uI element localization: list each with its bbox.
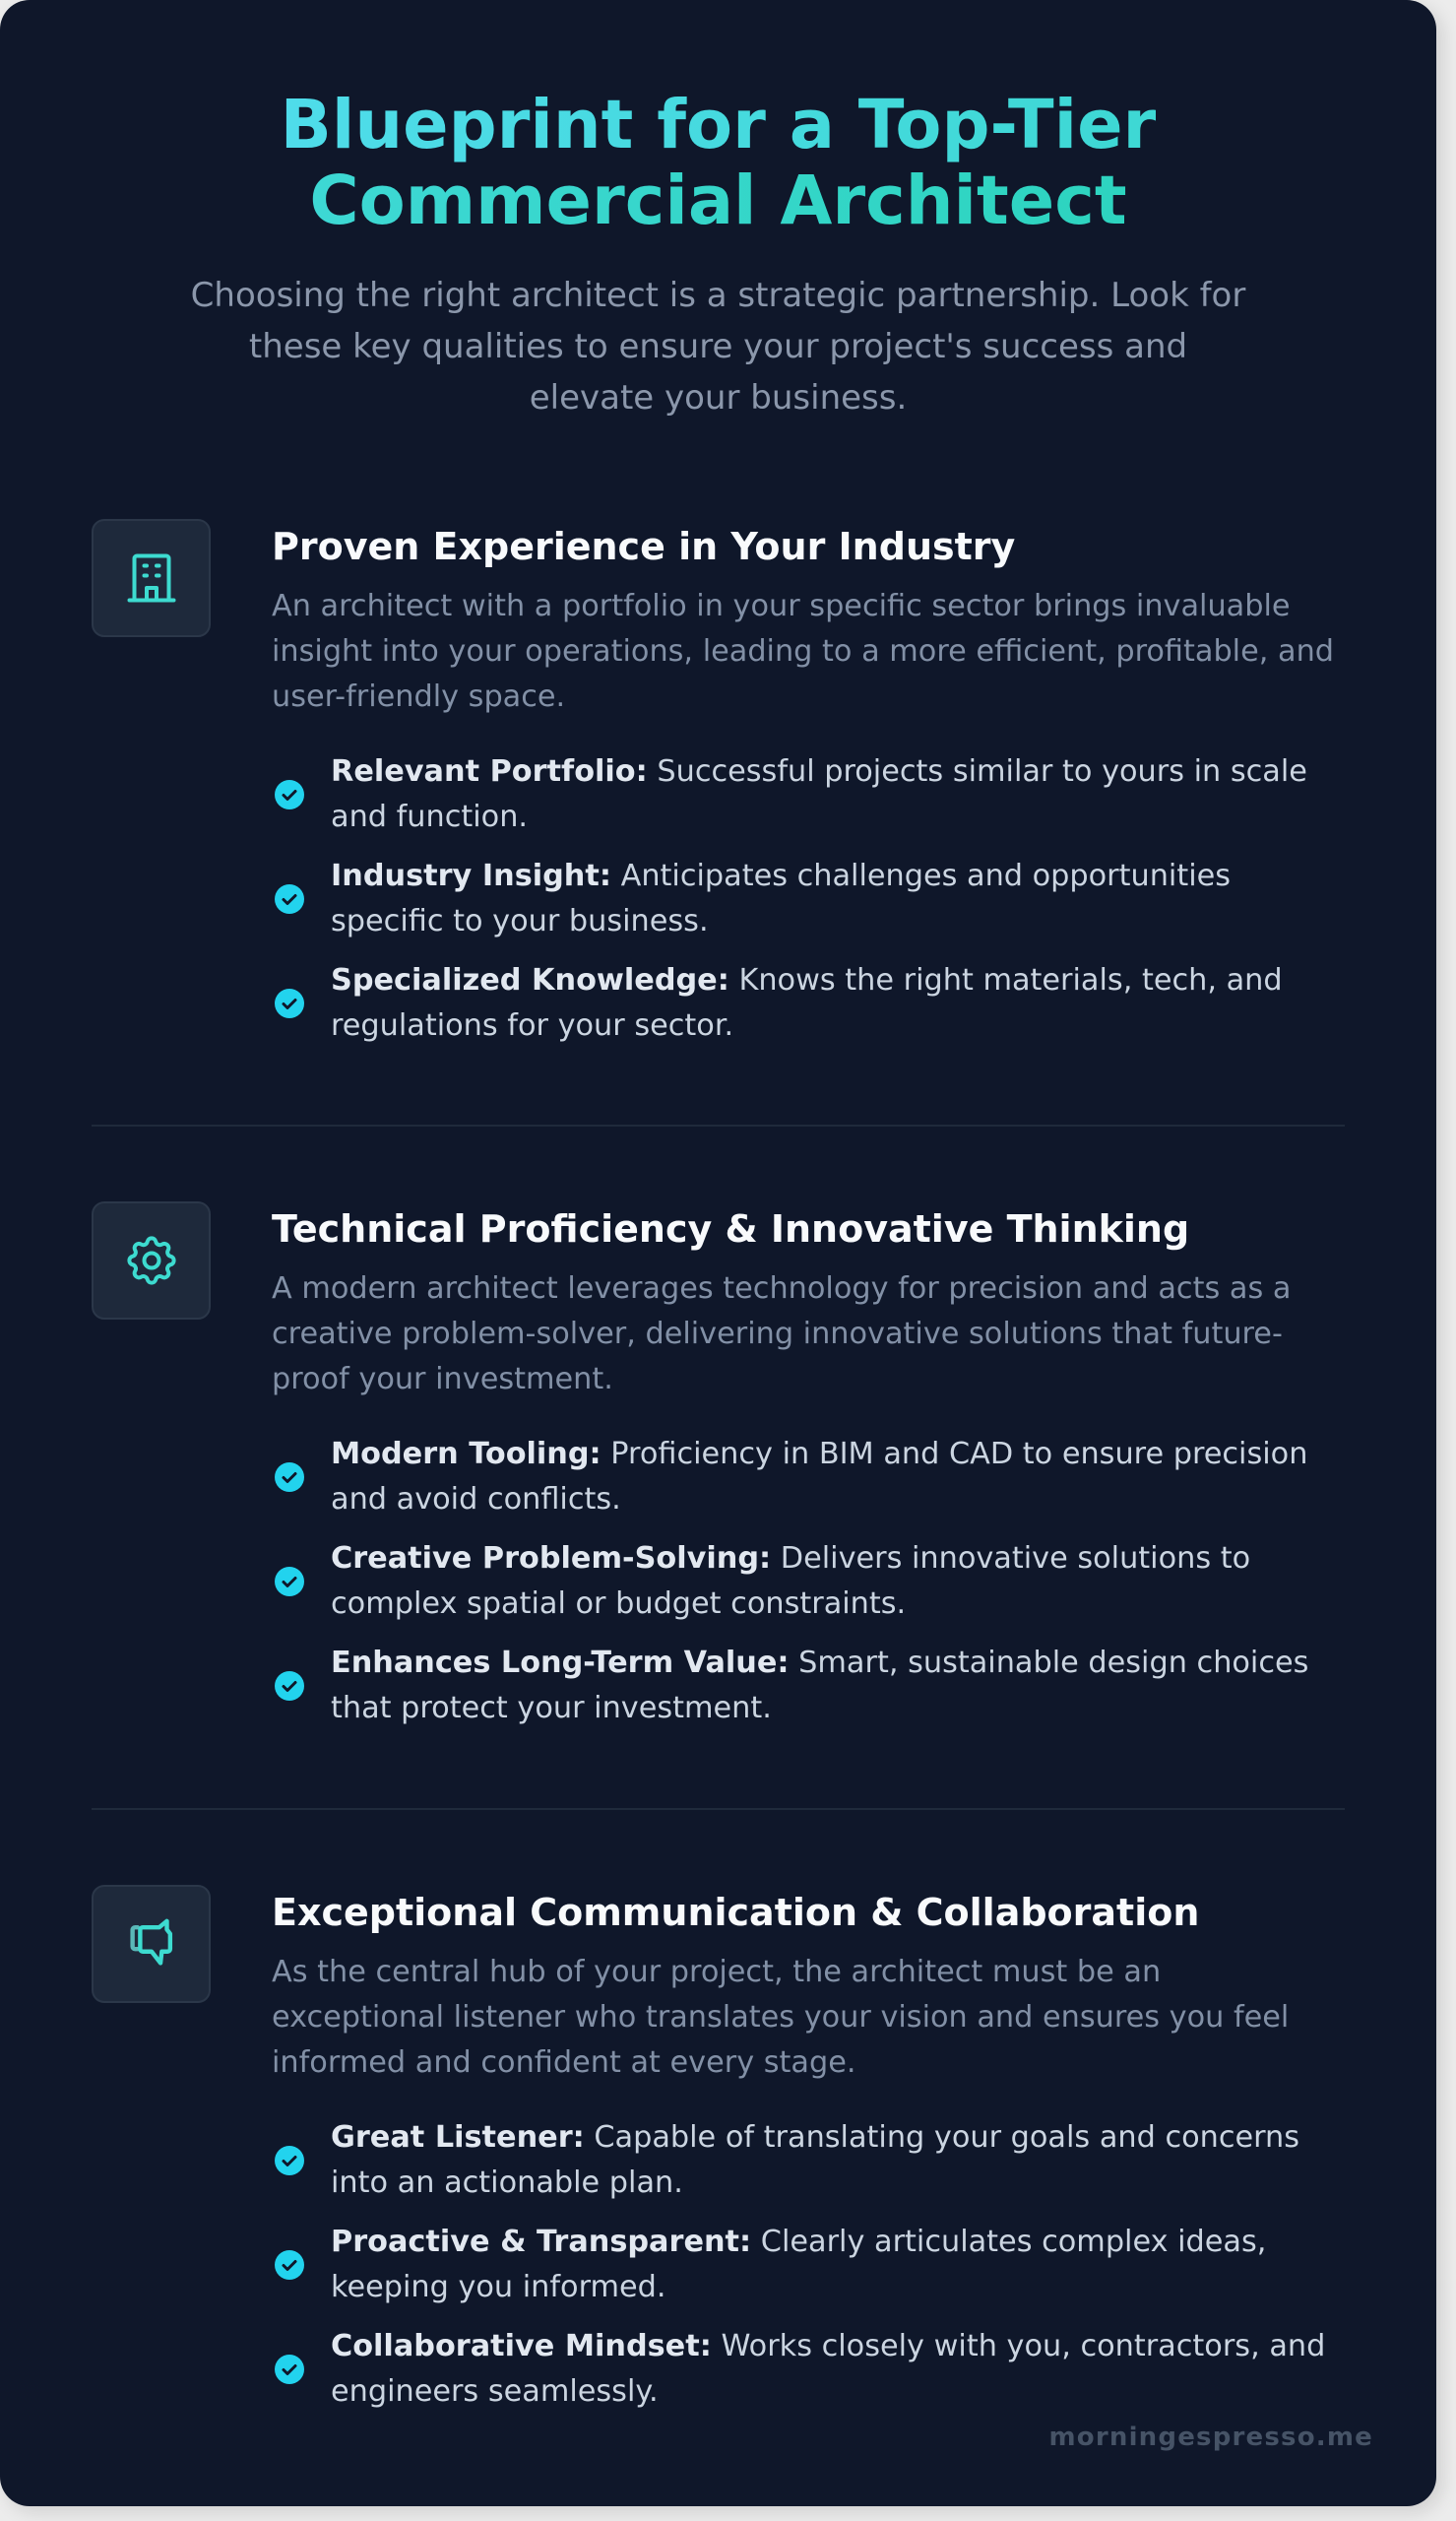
description: [272, 1271, 1291, 1396]
description: exceptional listener who translates your vision and ensures you feel: [272, 2000, 1289, 2035]
bullet: proactive: keeping you informed.: [331, 2270, 666, 2304]
bullet: specialized knowledge: regulations for your sector.: [331, 1008, 733, 1043]
description: [272, 1955, 1289, 2080]
description: As the central hub of your project, the architect must be an: [272, 1955, 1161, 1989]
subtitle: these key qualities to ensure your project's success and: [249, 327, 1187, 366]
subtitle: Choosing the right architect is a strategic partnership. Look for: [191, 276, 1245, 315]
bullet: long-term value: Enhances Long-Term Value: Smart, sustainable design choices: [331, 1646, 1308, 1680]
bullet: relevant portfolio: and function.: [331, 800, 528, 834]
bullet: industry insight: Industry Insight: Anticipates challenges and opportunities: [331, 859, 1231, 893]
watermark: morningespresso.me: [1048, 2423, 1373, 2452]
bullet: great listener: [275, 2120, 1299, 2200]
panel: technical proficiency: [92, 1201, 1308, 1725]
bullet: collaborative: engineers seamlessly.: [331, 2374, 659, 2409]
description: A modern architect leverages technology for precision and acts as a: [272, 1271, 1291, 1306]
description: proof your investment.: [272, 1362, 613, 1396]
description: An architect with a portfolio in your specific sector brings invaluable: [272, 589, 1291, 623]
bullet: long-term value: [275, 1646, 1308, 1725]
description: [272, 589, 1334, 714]
panel: communication: [92, 1885, 1325, 2409]
bullet: great listener: into an actionable plan.: [331, 2165, 683, 2200]
description: insight into your operations, leading to a more efficient, profitable, and: [272, 634, 1334, 669]
bullet: proactive: Proactive & Transparent: Clearly articulates complex ideas,: [331, 2225, 1266, 2259]
description: creative problem-solver, delivering innovative solutions that future-: [272, 1317, 1283, 1351]
description: informed and confident at every stage.: [272, 2045, 855, 2080]
heading: Technical Proficiency & Innovative Thinking: [272, 1207, 1189, 1251]
subtitle: [191, 276, 1246, 418]
bullet: long-term value: that protect your investment.: [331, 1691, 772, 1725]
description: user-friendly space.: [272, 679, 565, 714]
bullet: relevant portfolio: [275, 754, 1307, 834]
bullet: relevant portfolio: Relevant Portfolio: Successful projects similar to yours in scale: [331, 754, 1307, 789]
bullet: specialized knowledge: [275, 963, 1283, 1043]
bullet: collaborative: Collaborative Mindset: Works closely with you, contractors, and: [331, 2329, 1325, 2363]
bullet: creative problem-solving: Creative Problem-Solving: Delivers innovative solutions to: [331, 1541, 1250, 1576]
bullet: modern tooling: Modern Tooling: Proficiency in BIM and CAD to ensure precision: [331, 1437, 1307, 1471]
bullet: creative problem-solving: complex spatial or budget constraints.: [331, 1586, 906, 1621]
icon: gear: [92, 1201, 211, 1320]
bullet: modern tooling: [275, 1437, 1307, 1517]
icon: building: [92, 519, 211, 637]
panel: proven experience: [92, 519, 1334, 1043]
bullet: great listener: Great Listener: Capable of translating your goals and concerns: [331, 2120, 1299, 2155]
bullet: modern tooling: and avoid conflicts.: [331, 1482, 621, 1517]
subtitle: elevate your business.: [530, 378, 907, 418]
icon: chat bubbles: [92, 1885, 211, 2003]
bullet: creative problem-solving: [275, 1541, 1250, 1621]
heading: Exceptional Communication & Collaboration: [272, 1891, 1199, 1934]
bullet: industry insight: specific to your business.: [331, 904, 709, 938]
bullet: industry insight: [275, 859, 1231, 938]
heading: Proven Experience in Your Industry: [272, 525, 1015, 568]
title: Commercial Architect: [309, 162, 1127, 240]
bullet: proactive: [275, 2225, 1266, 2304]
bullet: specialized knowledge: Specialized Knowledge: Knows the right materials, tech, and: [331, 963, 1283, 998]
title: Blueprint for a Top-Tier: [281, 86, 1156, 164]
bullet: collaborative: [275, 2329, 1325, 2409]
title: [281, 86, 1156, 240]
